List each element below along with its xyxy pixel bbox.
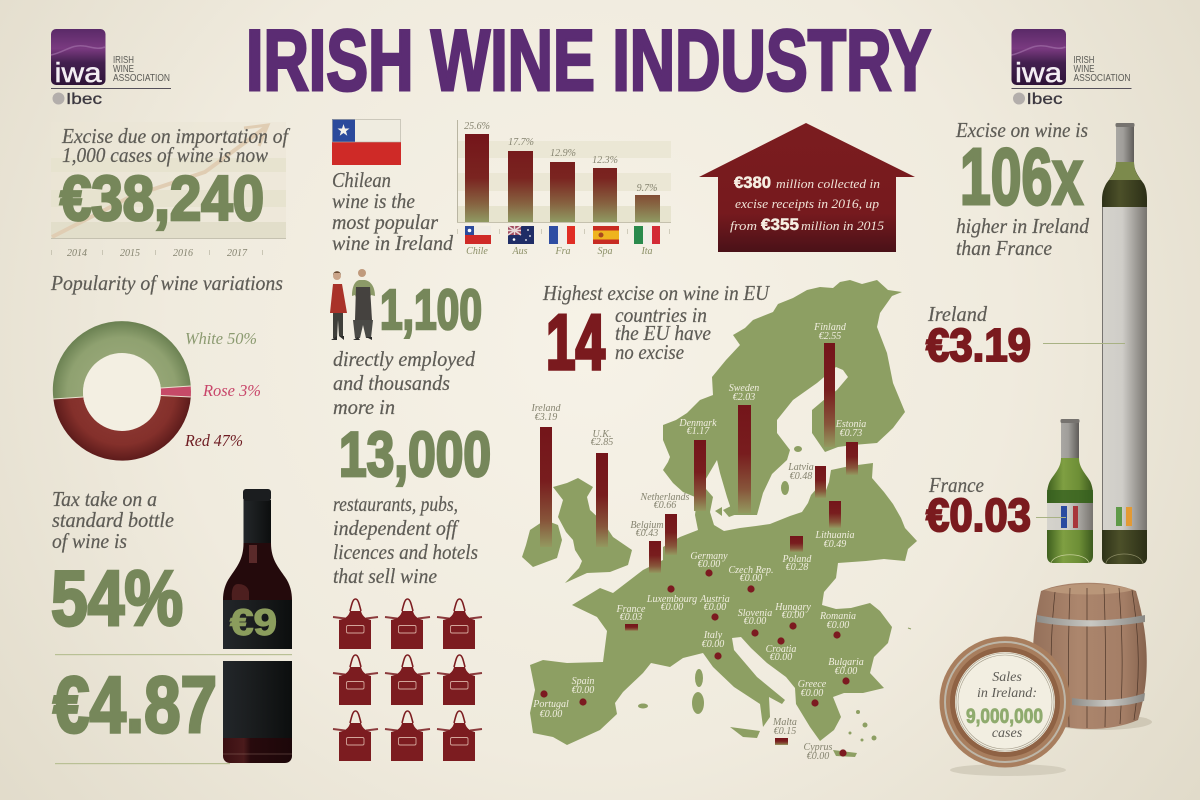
map labels: Croatia [766, 644, 796, 655]
text: directly employed: directly employed [333, 347, 475, 371]
map labels: France [616, 604, 646, 615]
tax take text: Tax take on a [52, 487, 157, 511]
icon: short French wine bottle [1047, 419, 1093, 563]
map labels: €0.00 [827, 620, 849, 631]
tax take text [52, 487, 174, 553]
callout: house of excise receipts: €380 [734, 173, 771, 192]
logo: IWA left: WINE [113, 63, 134, 75]
map labels: Romania [819, 611, 856, 622]
map labels: €0.00 [744, 616, 766, 627]
map labels: Bulgaria [828, 657, 864, 668]
text: Ireland 3.19 euros: Ireland [927, 302, 987, 326]
callout: house of excise receipts: million collected in [776, 176, 880, 191]
map labels: Italy [703, 630, 723, 641]
map labels: €0.00 [807, 751, 829, 762]
text: higher in Ireland than France: higher in Ireland [956, 214, 1089, 238]
callout: house of excise receipts: from [730, 218, 757, 233]
bar chart: most popular wine origins: 9.7% [637, 183, 657, 194]
tax take text: standard bottle [52, 508, 174, 532]
map labels: €0.73 [840, 428, 862, 439]
map labels: €0.00 [698, 559, 720, 570]
text: restaurants and pubs: licences and hotels [333, 540, 478, 564]
map labels: €2.55 [819, 331, 841, 342]
text: higher in Ireland than France [956, 214, 1089, 260]
text: Ireland 3.19 euros: €3.19 [926, 319, 1031, 371]
map labels: €0.00 [702, 639, 724, 650]
Great Britain [553, 478, 632, 583]
Ireland [522, 520, 562, 567]
map labels: U.K. [593, 429, 611, 440]
map labels: Malta [772, 717, 797, 728]
flag: Australia [508, 226, 534, 244]
callout: house of excise receipts: €355 [761, 215, 799, 234]
bar chart: most popular wine origins: 25.6% [464, 121, 490, 132]
figure: 14 countries: 14 [546, 298, 605, 386]
map labels: Lithuania [815, 530, 854, 541]
text: France 0.03 euros: €0.03 [926, 489, 1031, 541]
bar chart: most popular wine origins: Ita [640, 246, 653, 257]
title: IRISH WINE INDUSTRY [246, 13, 931, 109]
map labels: Cyprus [804, 742, 833, 753]
map labels: €0.00 [740, 573, 762, 584]
icon: tall Irish wine bottle [1102, 123, 1147, 564]
text: countries with no excise: no excise [615, 340, 684, 364]
bar chart: most popular wine origins: 17.7% [508, 137, 534, 148]
panel: excise on importation [51, 122, 291, 259]
donut chart [53, 321, 261, 461]
map labels: Finland [813, 322, 847, 333]
text: directly employed: and thousands [333, 371, 450, 395]
year axis: 2014 [67, 248, 87, 259]
figure: 106x: 106x [960, 132, 1083, 221]
islands [638, 446, 911, 757]
map labels: Sweden [729, 383, 759, 394]
map labels: €2.03 [733, 392, 755, 403]
leader lines [1036, 343, 1125, 518]
panel: excise on importation: 1,000 cases of wine is now [62, 143, 268, 167]
callout: house of excise receipts [699, 123, 915, 252]
text: Chilean wine: wine is the [332, 189, 415, 213]
map labels: Belgium [630, 520, 664, 531]
flag: Chile [465, 226, 491, 244]
map labels: €0.03 [620, 612, 642, 623]
year axis: 2017 [227, 248, 248, 259]
label: rose: Rose 3% [202, 381, 261, 400]
map labels: €2.85 [591, 437, 613, 448]
logo: IWA left [51, 29, 171, 108]
text: higher in Ireland than France: than France [956, 236, 1052, 260]
map labels: Czech Rep. [728, 565, 774, 576]
map labels: €1.17 [687, 426, 710, 437]
figure: 38,240 euros: €38,240 [60, 164, 264, 234]
text: countries with no excise: the EU have [615, 321, 711, 345]
map labels: €0.00 [540, 709, 562, 720]
text: excise on wine is: Excise on wine is [955, 118, 1088, 142]
heading: popularity of wine variations: Popularity of wine variations [50, 271, 283, 295]
label: white: White 50% [185, 329, 257, 348]
map labels: Hungary [774, 602, 811, 613]
Scandinavia [663, 280, 905, 515]
text: Chilean wine [332, 168, 453, 255]
map labels: Denmark [678, 418, 717, 429]
map labels: Latvia [787, 462, 814, 473]
text: Chilean wine: wine in Ireland [332, 231, 453, 255]
bar chart: most popular wine origins: Chile [466, 246, 488, 257]
flag: Italy [634, 226, 660, 244]
heading: highest excise on wine in EU: Highest excise on wine in EU [542, 281, 771, 305]
map labels: Germany [690, 551, 728, 562]
bar chart: most popular wine origins: Fra [554, 246, 570, 257]
text: Chilean wine: Chilean [332, 168, 391, 192]
map labels: Greece [798, 679, 827, 690]
label: red: Red 47% [184, 431, 243, 450]
map labels: €0.00 [572, 685, 594, 696]
icon grid: aprons [333, 599, 482, 761]
text: directly employed [333, 347, 475, 419]
continental Europe [530, 463, 917, 745]
map labels: Austria [699, 594, 730, 605]
text: France 0.03 euros: France [928, 473, 984, 497]
figure: 1,100 employed: 1,100 [380, 278, 482, 342]
figure: 4.87 euros: €4.87 [53, 660, 217, 749]
map labels: €0.00 [801, 688, 823, 699]
icon: barrel end with sales: 9,000,000 [966, 705, 1043, 728]
map labels: €0.00 [704, 602, 726, 613]
icon: two workers [330, 269, 375, 340]
map labels: Luxembourg [646, 594, 697, 605]
text: restaurants and pubs [333, 492, 478, 588]
logo: IWA left: iwa [54, 57, 102, 88]
bar chart: most popular wine origins [457, 120, 671, 257]
flag: France [549, 226, 575, 244]
map labels: €0.00 [835, 666, 857, 677]
map labels: €0.66 [654, 500, 676, 511]
map labels: €0.49 [824, 539, 846, 550]
map labels: €3.19 [535, 412, 557, 423]
map labels: €0.00 [770, 652, 792, 663]
logo: IWA left: ASSOCIATION [113, 72, 170, 84]
logo: IWA right: ASSOCIATION [1074, 72, 1130, 84]
sales text: Sales [992, 670, 1022, 685]
map labels: Slovenia [738, 608, 772, 619]
text: Chilean wine: most popular [332, 210, 439, 234]
icon: red wine bottle split by tax [223, 489, 292, 763]
logo: IWA right: iwa [1015, 57, 1062, 88]
map labels: Ireland [530, 403, 562, 414]
icon: barrel end with sales: in Ireland: [977, 686, 1037, 701]
year axis: 2015 [120, 248, 140, 259]
text: countries with no excise [615, 303, 711, 364]
panel: Chile flag [332, 119, 401, 165]
map labels: €0.28 [786, 562, 808, 573]
icon: barrel end with sales [940, 636, 1070, 776]
map bars: excise per country [540, 343, 858, 745]
text: directly employed: more in [333, 395, 395, 419]
callout: house of excise receipts: million in 2015 [801, 218, 885, 233]
year axis: 2016 [173, 248, 193, 259]
map labels: €0.00 [661, 602, 683, 613]
tax take text: of wine is [52, 529, 127, 553]
map: Europe [522, 280, 917, 757]
icon: barrel [1033, 583, 1152, 730]
map dots: zero excise countries [540, 569, 850, 757]
text: restaurants and pubs: restaurants, pubs, [333, 492, 458, 516]
text: restaurants and pubs: independent off [333, 516, 460, 540]
icon: barrel end with sales: cases [992, 726, 1023, 741]
bar chart: most popular wine origins: Aus [512, 246, 528, 257]
logo: IWA right: IRISH [1074, 54, 1094, 66]
bar chart: most popular wine origins: 12.3% [592, 155, 618, 166]
logo: IWA left: IRISH [113, 54, 134, 66]
figure: 54 percent: 54% [51, 554, 183, 642]
excise text: Excise due on importation of [61, 124, 291, 148]
map labels: Estonia [835, 419, 866, 430]
map labels: Poland [782, 554, 812, 565]
map labels: €0.43 [636, 528, 658, 539]
map labels: €0.15 [774, 726, 796, 737]
year axis [52, 248, 262, 259]
map labels [530, 322, 866, 762]
map labels: Netherlands [640, 492, 690, 503]
map labels: Spain [572, 676, 594, 687]
bar chart: most popular wine origins: 12.9% [550, 148, 576, 159]
map labels: Portugal [532, 699, 569, 710]
logo: IWA right [1012, 29, 1132, 108]
bar chart: most popular wine origins: Spa [598, 246, 612, 257]
text: countries with no excise: countries in [615, 303, 707, 327]
divider lines [55, 654, 292, 764]
logo: IWA right: Ibec [1026, 91, 1062, 108]
map labels: €0.48 [790, 471, 812, 482]
text: restaurants and pubs: that sell wine [333, 564, 437, 588]
map labels: €0.00 [782, 610, 804, 621]
9 euros label: €9 [230, 602, 277, 643]
callout: house of excise receipts: excise receipts in 2016, up [735, 196, 880, 211]
figure: 13,000 outlets: 13,000 [339, 420, 491, 490]
flag: Spain [593, 226, 619, 244]
logo: IWA left: Ibec [66, 91, 102, 108]
logo: IWA right: WINE [1074, 63, 1094, 75]
